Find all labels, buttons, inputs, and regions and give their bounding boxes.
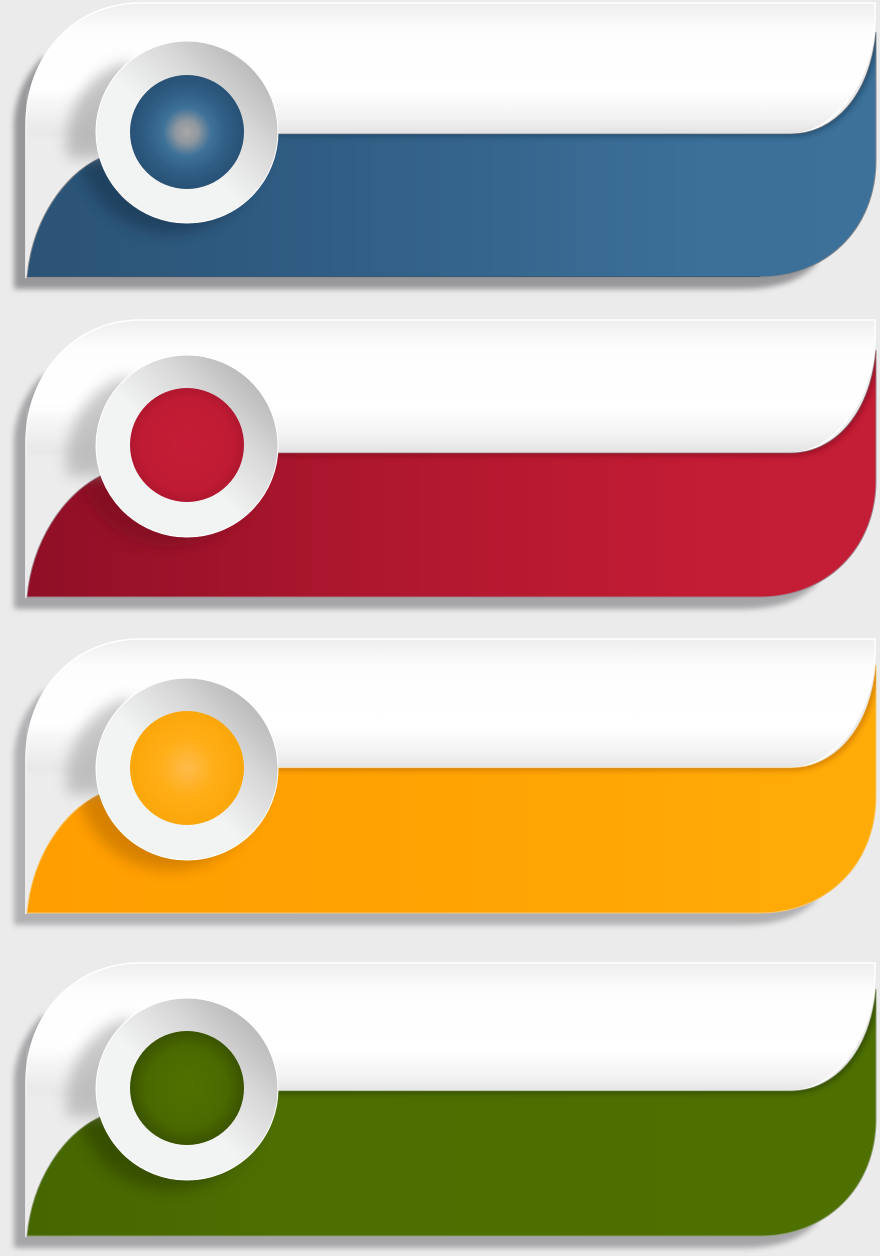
inner disc: red banner xyxy=(130,388,244,502)
band inner shadow: green banner xyxy=(77,987,874,1190)
panel: green banner xyxy=(14,963,876,1248)
inner disc: amber banner xyxy=(130,711,244,825)
paper tab: green banner xyxy=(26,963,875,1236)
colour band: red banner xyxy=(27,350,876,597)
paper fold shade: amber banner xyxy=(26,719,120,913)
drop shadow: green banner xyxy=(14,1015,818,1248)
colour band: amber banner xyxy=(27,665,876,913)
inner disc: green banner xyxy=(130,1031,244,1145)
panel: blue banner xyxy=(14,3,876,289)
band inner shadow: blue banner xyxy=(27,30,874,277)
drop shadow: red banner xyxy=(14,375,818,609)
paper fold shade: red banner xyxy=(26,403,120,597)
paper tab: red banner xyxy=(26,320,875,597)
band inner shadow: amber banner xyxy=(77,663,874,870)
paper fold shade: green banner xyxy=(26,1042,120,1236)
colour band: blue banner xyxy=(27,32,876,277)
panel: red banner xyxy=(14,320,876,609)
ring shadow on paper: amber banner xyxy=(67,698,150,796)
ring: green banner xyxy=(96,998,278,1180)
ring shadow on paper: red banner xyxy=(67,376,150,478)
ring: red banner xyxy=(96,355,278,537)
ring: blue banner xyxy=(96,41,278,223)
band inner shadow: red banner xyxy=(77,348,874,547)
ring shadow on paper: green banner xyxy=(67,1018,150,1119)
ring shadow on paper: blue banner xyxy=(67,62,150,160)
paper fold shade: blue banner xyxy=(26,85,120,277)
paper tab: blue banner xyxy=(26,3,875,277)
ring: amber banner xyxy=(96,678,278,860)
colour band: green banner xyxy=(27,989,876,1236)
inner disc: blue banner xyxy=(130,75,244,189)
paper tab: amber banner xyxy=(26,639,875,913)
panel: amber banner xyxy=(14,639,876,925)
drop shadow: amber banner xyxy=(14,691,818,925)
drop shadow: blue banner xyxy=(14,57,818,289)
